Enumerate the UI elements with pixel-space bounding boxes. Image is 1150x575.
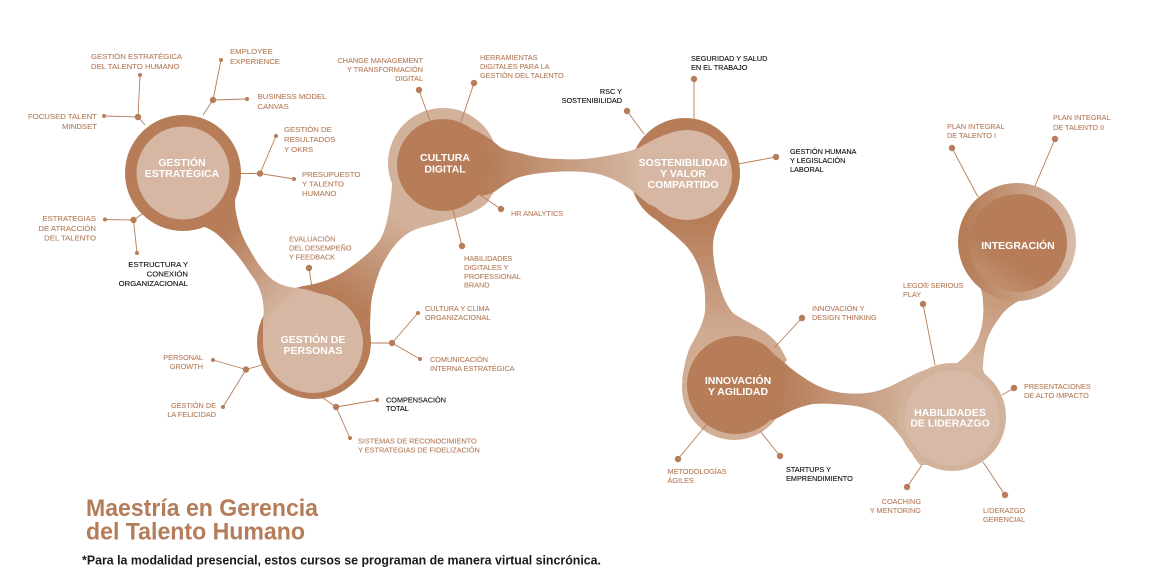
item: business model canvas <box>213 92 327 111</box>
item: focused talent mindset <box>28 112 138 131</box>
panel: innovación y agilidad <box>668 304 877 485</box>
item: presentaciones de alto impacto: DE ALTO IMPACTO <box>1024 391 1089 400</box>
item: liderazgo gerencial: GERENCIAL <box>983 515 1025 524</box>
item: compensación total: COMPENSACIÓN <box>386 396 446 404</box>
halo: innovación y agilidad <box>682 336 786 440</box>
panel: gestión de personas <box>163 234 515 454</box>
item: estrategias de atracción del talento <box>38 212 145 242</box>
item: gestión de resultados y okrs: GESTIÓN DE <box>284 125 332 134</box>
item: personal growth <box>163 353 262 373</box>
item: plan integral de talento i <box>947 122 1005 197</box>
panel: integración <box>947 113 1111 252</box>
item: change management <box>337 56 430 121</box>
circle outer: integración <box>958 183 1076 301</box>
heading: gestión de personas: GESTIÓN DE <box>281 333 345 346</box>
item: presupuesto y talento humano: Y TALENTO <box>302 180 344 188</box>
circle outer: sostenibilidad <box>630 118 740 228</box>
item: presentaciones de alto impacto: PRESENTACIONES <box>1024 382 1091 391</box>
panel: sostenibilidad y valor compartido <box>562 54 857 191</box>
item: coaching y mentoring: Y MENTORING <box>870 506 921 515</box>
item: metodologías ágiles <box>668 424 727 485</box>
heading: sostenibilidad: Y VALOR <box>660 168 706 180</box>
item: evaluación del desempeño y feedback: EVALUACIÓN <box>289 234 336 244</box>
ribbon: estratégica to personas <box>180 173 363 343</box>
item: hr analytics: HR ANALYTICS <box>511 209 563 218</box>
item: sistemas de reconocimiento <box>336 407 480 454</box>
item: gestión humana <box>738 147 857 174</box>
item: habilidades digitales: PROFESSIONAL <box>464 272 521 281</box>
item: gestión de la felicidad: LA FELICIDAD <box>167 410 216 419</box>
item: coaching y mentoring <box>870 465 922 515</box>
item: lego serious play: LEGO® SERIOUS <box>903 281 964 290</box>
heading: gestión de personas: PERSONAS <box>284 345 342 357</box>
item: sistemas de reconocimiento: Y ESTRATEGIAS DE FIDELIZACIÓN <box>358 446 480 454</box>
title: Maestría en Gerencia <box>86 495 319 522</box>
item: estructura y conexión organizacional: ESTRUCTURA Y <box>128 260 188 269</box>
item: rsc y sostenibilidad <box>562 87 644 134</box>
heading: innovación y agilidad: INNOVACIÓN <box>705 374 771 387</box>
item: lego serious play <box>903 281 964 365</box>
item: personal growth: PERSONAL <box>163 353 203 362</box>
item: personal growth: GROWTH <box>170 362 203 371</box>
heading: cultura digital: CULTURA <box>420 152 470 164</box>
ribbon: innovación to habilidades <box>740 351 950 465</box>
heading: gestión estratégica: ESTRATÉGICA <box>145 167 220 180</box>
flow diagram: connected circles <box>125 108 1076 471</box>
item: evaluación del desempeño y feedback: DEL DESEMPEÑO <box>289 244 352 252</box>
item: employee experience <box>203 47 280 115</box>
item: plan integral de talento i: PLAN INTEGRAL <box>947 122 1005 131</box>
ribbon: personas to cultura <box>297 170 497 343</box>
circle inner: integración <box>969 194 1067 292</box>
item: estrategias de atracción del talento: DE ATRACCIÓN <box>38 224 96 233</box>
item: compensación total: TOTAL <box>386 404 409 413</box>
item: estructura y conexión organizacional: CONEXIÓN <box>147 270 188 278</box>
item: seguridad y salud <box>691 54 767 119</box>
item: evaluación del desempeño y feedback: Y FEEDBACK <box>289 252 335 262</box>
item: rsc y sostenibilidad: RSC Y <box>600 87 622 96</box>
item: presupuesto y talento humano: PRESUPUESTO <box>302 170 360 179</box>
item: change management: DIGITAL <box>395 74 423 83</box>
item: gestión estratégica del talento humano <box>91 52 183 125</box>
item: estrategias de atracción del talento: ESTRATEGIAS <box>42 214 96 223</box>
item: employee experience: EMPLOYEE <box>230 47 273 56</box>
circle inner: habilidades de liderazgo <box>904 370 1000 466</box>
item: cultura y clima organizacional: CULTURA Y CLIMA <box>425 304 490 313</box>
item: lego serious play: PLAY <box>903 290 921 299</box>
item: habilidades digitales: BRAND <box>464 280 490 290</box>
heading: innovación y agilidad: Y AGILIDAD <box>708 386 768 398</box>
heading: gestión estratégica: GESTIÓN <box>158 156 206 169</box>
circle inner: sostenibilidad <box>642 130 732 220</box>
item: comunicación interna estratégica <box>392 343 515 373</box>
item: presupuesto y talento humano: HUMANO <box>302 189 336 198</box>
item: estructura y conexión organizacional <box>119 220 189 288</box>
item: cultura y clima organizacional <box>370 304 490 346</box>
item: comunicación interna estratégica: INTERNA ESTRATÉGICA <box>430 364 515 373</box>
circle inner: gestión de personas <box>263 293 363 393</box>
item: employee experience: EXPERIENCE <box>230 57 280 66</box>
item: gestión de resultados y okrs <box>241 125 335 177</box>
item: habilidades digitales: DIGITALES Y <box>464 263 508 272</box>
item: gestión de resultados y okrs: RESULTADOS <box>284 135 335 144</box>
item: estructura y conexión organizacional: ORGANIZACIONAL <box>119 279 189 288</box>
item: plan integral de talento ii: DE TALENTO II <box>1053 123 1104 132</box>
item: herramientas digitales: HERRAMIENTAS <box>480 53 538 62</box>
item: plan integral de talento i: DE TALENTO I <box>947 131 996 140</box>
item: presupuesto y talento humano <box>260 170 360 198</box>
item: cultura y clima organizacional: ORGANIZACIONAL <box>425 313 490 322</box>
item: comunicación interna estratégica: COMUNICACIÓN <box>430 355 488 364</box>
item: plan integral de talento ii <box>1035 113 1111 186</box>
item: seguridad y salud: SEGURIDAD Y SALUD <box>691 54 767 63</box>
item: business model canvas: BUSINESS MODEL <box>258 92 327 101</box>
circle: innovación y agilidad <box>687 336 785 434</box>
item: sistemas de reconocimiento: SISTEMAS DE RECONOCIMIENTO <box>358 436 477 446</box>
panel: cultura digital <box>337 53 564 290</box>
item: herramientas digitales: DIGITALES PARA LA <box>480 62 550 71</box>
item: liderazgo gerencial <box>983 462 1025 524</box>
heading: habilidades de liderazgo: DE LIDERAZGO <box>910 418 990 430</box>
item: compensación total <box>323 396 446 413</box>
item: focused talent mindset: MINDSET <box>62 122 97 131</box>
item: rsc y sostenibilidad: SOSTENIBILIDAD <box>562 96 622 105</box>
circle outer: gestión estratégica <box>125 115 241 231</box>
item: gestión de la felicidad <box>167 370 246 419</box>
item: liderazgo gerencial: LIDERAZGO <box>983 506 1025 515</box>
circle base: gestión de personas <box>257 285 371 399</box>
item: innovación y design thinking: DESIGN THINKING <box>812 313 877 322</box>
item: plan integral de talento ii: PLAN INTEGRAL <box>1053 113 1111 122</box>
item: evaluación del desempeño y feedback <box>289 234 352 288</box>
ribbon: cultura to sostenibilidad <box>445 129 687 213</box>
item: gestión estratégica del talento humano: DEL TALENTO HUMANO <box>91 62 179 71</box>
item: gestión estratégica del talento humano: GESTIÓN ESTRATÉGICA <box>91 52 183 61</box>
halo: cultura digital <box>388 108 498 218</box>
circle inner: gestión estratégica <box>136 126 230 220</box>
item: startups y emprendimiento: STARTUPS Y <box>786 465 831 474</box>
heading: sostenibilidad: COMPARTIDO <box>648 179 718 191</box>
item: presentaciones de alto impacto <box>1002 382 1091 400</box>
item: gestión de la felicidad: GESTIÓN DE <box>171 401 216 410</box>
item: coaching y mentoring: COACHING <box>882 497 921 506</box>
item: estrategias de atracción del talento: DEL TALENTO <box>44 234 96 242</box>
footnote: *Para la modalidad presencial, estos cursos se programan de manera virtual sincrónica. <box>82 554 601 568</box>
title: del Talento Humano <box>86 518 305 546</box>
item: change management: Y TRANSFORMACIÓN <box>347 65 423 74</box>
item: herramientas digitales <box>461 53 564 122</box>
item: focused talent mindset: FOCUSED TALENT <box>28 112 97 121</box>
ribbon: habilidades to integración <box>930 270 1057 400</box>
ribbon: sostenibilidad to innovación <box>636 190 787 390</box>
item: habilidades digitales: HABILIDADES <box>464 254 512 263</box>
item: business model canvas: CANVAS <box>258 102 289 111</box>
item: innovación y design thinking: INNOVACIÓN Y <box>812 304 865 313</box>
item: gestión humana: LABORAL <box>790 165 824 174</box>
heading: sostenibilidad: SOSTENIBILIDAD <box>639 157 728 169</box>
item: metodologías ágiles: METODOLOGÍAS <box>668 467 727 476</box>
circle outer: habilidades de liderazgo <box>898 363 1006 471</box>
item: gestión humana: GESTIÓN HUMANA <box>790 147 857 156</box>
item: startups y emprendimiento: EMPRENDIMIENTO <box>786 474 853 483</box>
item: gestión humana: Y LEGISLACIÓN <box>790 156 845 165</box>
item: hr analytics <box>480 195 563 218</box>
item: metodologías ágiles: ÁGILES <box>668 476 694 485</box>
item: change management: CHANGE MANAGEMENT <box>337 56 424 65</box>
item: habilidades digitales <box>453 210 521 290</box>
panel: habilidades de liderazgo <box>870 281 1091 524</box>
item: startups y emprendimiento <box>760 431 853 483</box>
panel: gestión estratégica <box>28 47 360 288</box>
item: gestión de resultados y okrs: Y OKRS <box>284 145 313 154</box>
item: herramientas digitales: GESTIÓN DEL TALENTO <box>480 71 564 80</box>
heading: habilidades de liderazgo: HABILIDADES <box>914 407 986 419</box>
heading: cultura digital: DIGITAL <box>424 164 466 176</box>
circle: cultura digital <box>397 119 489 211</box>
heading: integración: INTEGRACIÓN <box>981 239 1055 252</box>
item: innovación y design thinking <box>775 304 877 347</box>
item: seguridad y salud: EN EL TRABAJO <box>691 63 748 72</box>
